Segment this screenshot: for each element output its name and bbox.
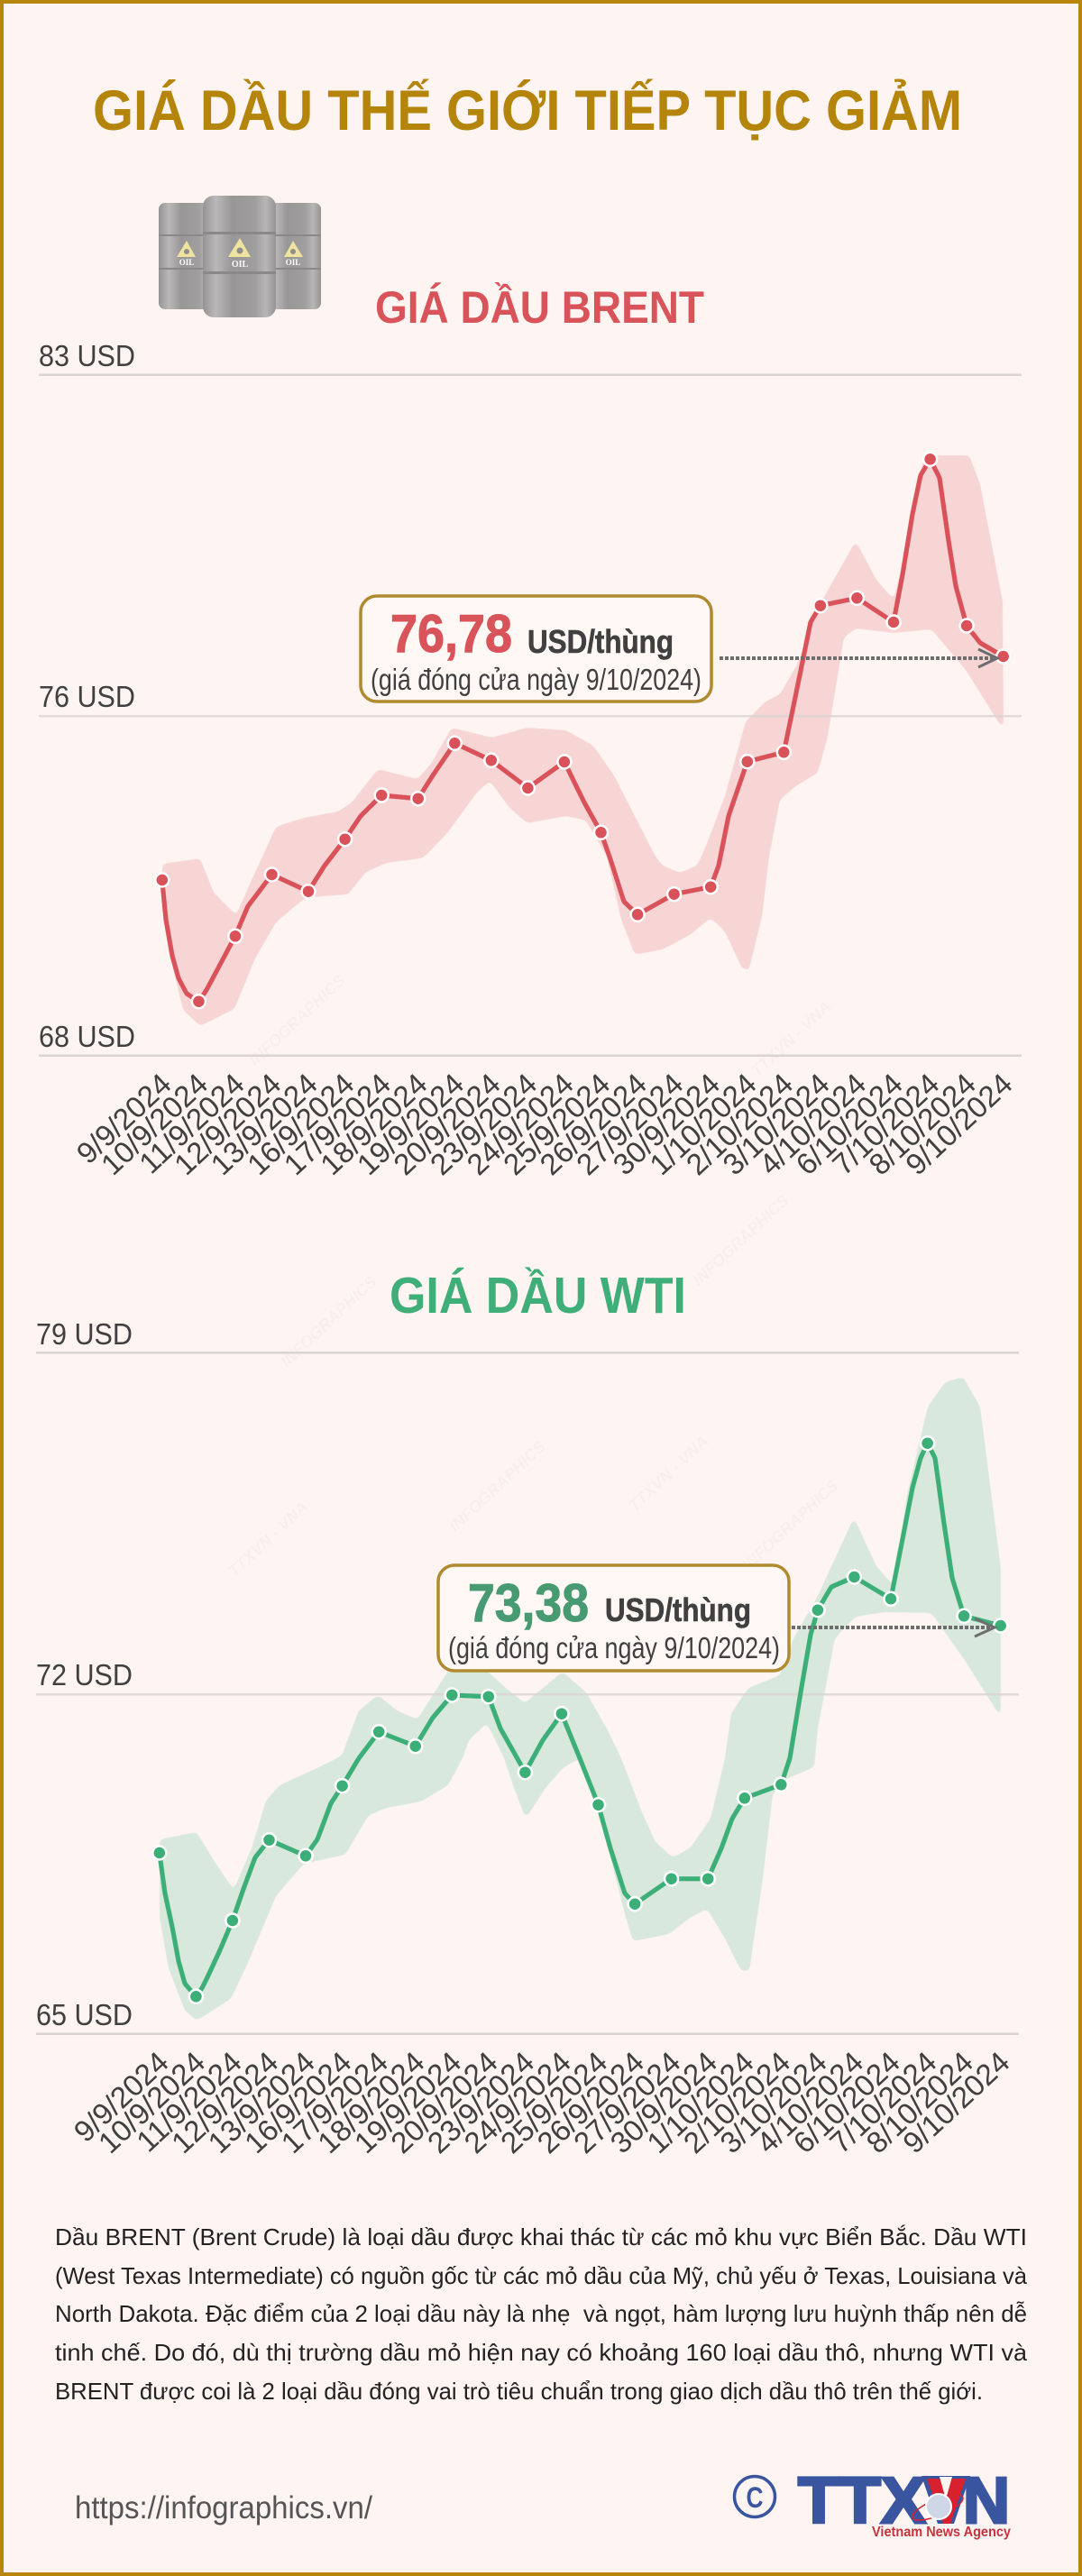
text block: explanation of Brent and WTI: Dầu BRENT (Brent Crude) là loại dầu được khai thác từ các mỏ khu vực Biển Bắc. Dầu WTI (55, 2223, 1027, 2251)
watermarks: INFOGRAPHICS (245, 971, 349, 1069)
icon: copyright (734, 2476, 775, 2517)
icon: copyright: C (747, 2481, 763, 2514)
WTI date axis labels: 30/9/2024 (604, 2045, 723, 2159)
WTI date axis labels: 10/9/2024 (92, 2045, 211, 2159)
WTI date axis labels: 17/9/2024 (275, 2045, 394, 2159)
WTI date axis labels: 7/10/2024 (823, 2045, 943, 2159)
WTI date axis labels: 18/9/2024 (311, 2045, 431, 2159)
logo: TTXVN Vietnam News Agency: TTX (798, 2465, 926, 2537)
text block: explanation of Brent and WTI: BRENT được coi là 2 loại dầu đóng vai trò tiêu chuẩn trong giao dịch dầu thô trên thế giới. (55, 2378, 983, 2405)
Brent date axis labels: 4/10/2024 (753, 1067, 872, 1181)
WTI date axis labels: 16/9/2024 (238, 2045, 358, 2159)
WTI date axis labels: 8/10/2024 (859, 2045, 979, 2159)
callout: WTI closing price: 73,38 (468, 1573, 589, 1633)
callout: WTI closing price: (giá đóng cửa ngày 9/10/2024) (448, 1631, 780, 1664)
WTI date axis labels (68, 2045, 1016, 2159)
icon: oil barrels: OIL (179, 258, 194, 267)
Brent date axis labels: 7/10/2024 (826, 1067, 946, 1181)
watermarks: INFOGRAPHICS (445, 1437, 549, 1536)
Brent date axis labels: 8/10/2024 (862, 1067, 982, 1181)
WTI line (160, 1444, 1001, 1996)
text block: explanation of Brent and WTI: North Dakota. Đặc điểm của 2 loại dầu này là nhẹ và ngọt, hàm lượng lưu huỳnh thấp nên dễ (55, 2300, 1027, 2327)
gridlines and axis labels: 83 USD (39, 339, 135, 372)
watermarks: TTXVN - VNA (625, 1432, 711, 1515)
heading: Brent: GIÁ DẦU BRENT (375, 282, 704, 333)
Brent range band (162, 455, 1004, 1026)
panel: Brent chart (39, 339, 1022, 1181)
callout: Brent closing price (361, 596, 711, 701)
Brent date axis labels: 9/9/2024 (70, 1067, 178, 1170)
Brent date axis labels: 3/10/2024 (716, 1067, 836, 1181)
heading: WTI: GIÁ DẦU WTI (390, 1266, 686, 1325)
icon: oil barrels (159, 196, 321, 317)
gridlines and axis labels: 65 USD (36, 1998, 133, 2031)
watermarks (225, 971, 842, 1581)
WTI date axis labels: 3/10/2024 (713, 2045, 833, 2159)
Brent date axis labels: 27/9/2024 (570, 1067, 690, 1181)
WTI range band (160, 1377, 1001, 2021)
Brent data points (155, 453, 1010, 1008)
gridlines and axis labels: 68 USD (39, 1020, 135, 1053)
WTI date axis labels: 20/9/2024 (384, 2045, 504, 2159)
WTI date axis labels: 9/10/2024 (896, 2045, 1016, 2159)
watermarks: TTXVN - VNA (747, 997, 834, 1080)
Brent date axis labels: 1/10/2024 (643, 1067, 763, 1181)
WTI date axis labels: 27/9/2024 (567, 2045, 687, 2159)
Brent date axis labels: 30/9/2024 (607, 1067, 726, 1181)
Brent date axis labels: 9/10/2024 (899, 1067, 1019, 1181)
panel: WTI chart (36, 1317, 1019, 2159)
text block: explanation of Brent and WTI (55, 2223, 1028, 2405)
logo: TTXVN Vietnam News Agency: Vietnam News Agency (872, 2525, 1011, 2540)
Brent date axis labels: 2/10/2024 (680, 1067, 799, 1181)
text block: explanation of Brent and WTI: (West Texas Intermediate) có nguồn gốc từ các mỏ dầu của Mỹ, chủ yếu ở Texas, Louisiana và (55, 2262, 1028, 2289)
watermarks: INFOGRAPHICS (277, 1272, 381, 1371)
WTI date axis labels: 26/9/2024 (530, 2045, 650, 2159)
watermarks: TTXVN - VNA (225, 1498, 311, 1581)
icon: oil barrels: OIL (232, 260, 248, 270)
Brent date axis labels: 17/9/2024 (278, 1067, 397, 1181)
WTI date axis labels: 2/10/2024 (677, 2045, 796, 2159)
Brent date axis labels: 11/9/2024 (133, 1067, 251, 1180)
WTI date axis labels: 4/10/2024 (750, 2045, 869, 2159)
gridlines and axis labels (39, 339, 1022, 1057)
gridlines and axis labels (36, 1317, 1019, 2035)
WTI date axis labels: 6/10/2024 (786, 2045, 906, 2159)
Brent date axis labels: 26/9/2024 (533, 1067, 653, 1181)
arrow: Brent callout to last point (720, 649, 997, 667)
Brent date axis labels: 23/9/2024 (424, 1067, 543, 1181)
watermarks: INFOGRAPHICS (689, 1191, 793, 1289)
icon: oil barrels: OIL (286, 258, 300, 267)
WTI date axis labels: 13/9/2024 (201, 2045, 321, 2159)
logo: TTXVN Vietnam News Agency (798, 2465, 1011, 2540)
Brent date axis labels (70, 1067, 1019, 1181)
Brent date axis labels: 20/9/2024 (387, 1067, 507, 1181)
WTI data points (152, 1436, 1007, 2003)
callout: Brent closing price: (giá đóng cửa ngày 9/10/2024) (371, 663, 701, 696)
title: GIÁ DẦU THẾ GIỚI TIẾP TỤC GIẢM (93, 78, 962, 142)
callout: Brent closing price: USD/thùng (527, 623, 674, 660)
Brent line (162, 459, 1004, 1002)
WTI date axis labels: 11/9/2024 (130, 2045, 248, 2159)
arrow: WTI callout to last point (792, 1618, 995, 1636)
WTI date axis labels: 9/9/2024 (68, 2045, 175, 2149)
WTI date axis labels: 1/10/2024 (640, 2045, 760, 2159)
callout: Brent closing price: 76,78 (390, 604, 512, 664)
text block: explanation of Brent and WTI: tinh chế. Do đó, dù thị trường dầu mỏ hiện nay có khoảng 160 loại dầu thô, nhưng WTI và (55, 2339, 1028, 2366)
WTI date axis labels: 25/9/2024 (494, 2045, 613, 2159)
Brent date axis labels: 13/9/2024 (204, 1067, 324, 1181)
Brent date axis labels: 25/9/2024 (497, 1067, 616, 1181)
gridlines and axis labels: 79 USD (36, 1317, 133, 1351)
Brent date axis labels: 6/10/2024 (789, 1067, 909, 1181)
callout: WTI closing price (438, 1565, 789, 1671)
gridlines and axis labels: 76 USD (39, 680, 135, 713)
WTI date axis labels: 12/9/2024 (165, 2045, 284, 2159)
Brent date axis labels: 16/9/2024 (241, 1067, 361, 1181)
source url: https://infographics.vn/ (75, 2490, 372, 2526)
callout: WTI closing price: USD/thùng (605, 1591, 751, 1628)
watermarks: INFOGRAPHICS (738, 1476, 842, 1574)
Brent date axis labels: 24/9/2024 (460, 1067, 580, 1181)
WTI date axis labels: 19/9/2024 (348, 2045, 467, 2159)
Brent date axis labels: 10/9/2024 (95, 1067, 214, 1181)
Brent date axis labels: 18/9/2024 (314, 1067, 434, 1181)
Brent date axis labels: 19/9/2024 (351, 1067, 470, 1181)
WTI date axis labels: 23/9/2024 (421, 2045, 540, 2159)
WTI date axis labels: 24/9/2024 (457, 2045, 577, 2159)
gridlines and axis labels: 72 USD (36, 1658, 133, 1691)
Brent date axis labels: 12/9/2024 (168, 1067, 287, 1181)
logo: TTXVN Vietnam News Agency: N (963, 2465, 1010, 2537)
